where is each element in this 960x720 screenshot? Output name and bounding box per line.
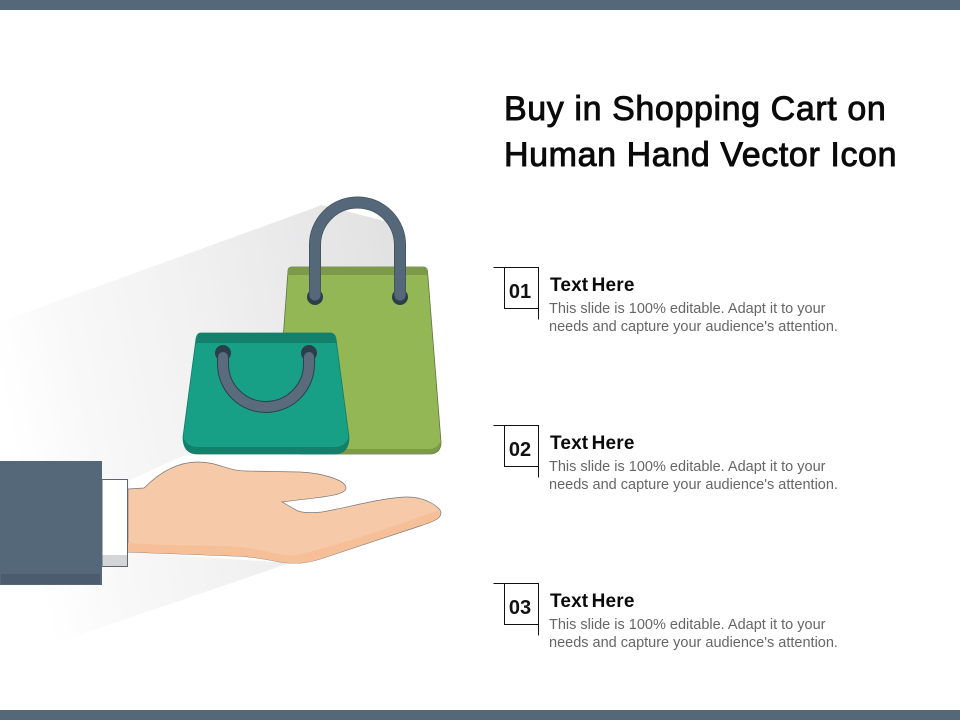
description 03: This slide is 100% editable. Adapt it to your [549, 617, 825, 633]
teal bag handle [215, 345, 317, 407]
description 01: This slide is 100% editable. Adapt it to your [549, 301, 825, 317]
green bag handle [307, 203, 408, 305]
top bar [0, 0, 960, 10]
description 03 [549, 617, 838, 651]
description 02: This slide is 100% editable. Adapt it to your [549, 459, 825, 475]
list item 03 [494, 583, 838, 651]
list item 01 [494, 267, 838, 335]
number frame 02 [494, 425, 539, 478]
description 02 [549, 459, 838, 493]
title: Human Hand Vector Icon [504, 136, 897, 174]
description 01: needs and capture your audience's attention. [549, 319, 838, 335]
list item 02 [494, 425, 838, 493]
description 01 [549, 301, 838, 335]
icon: green shopping bag [283, 203, 441, 454]
icon: teal shopping bag [183, 333, 349, 454]
bottom bar [0, 710, 960, 720]
illustration: hand holding shopping bags [0, 196, 442, 610]
shirt cuff [102, 480, 128, 566]
number frame 01 [494, 267, 539, 320]
number 03: 03 [509, 597, 531, 619]
title: Buy in Shopping Cart on [504, 90, 886, 128]
icon: hand [128, 462, 441, 563]
number frame 03 [494, 583, 539, 636]
heading 01: Text Here [550, 275, 635, 296]
description 03: needs and capture your audience's attention. [549, 635, 838, 651]
description 02: needs and capture your audience's attention. [549, 477, 838, 493]
suit sleeve [0, 461, 102, 585]
number 02: 02 [509, 439, 531, 461]
title [504, 90, 897, 174]
number 01: 01 [509, 281, 531, 303]
long shadow [0, 205, 400, 662]
heading 03: Text Here [550, 591, 635, 612]
heading 02: Text Here [550, 433, 635, 454]
